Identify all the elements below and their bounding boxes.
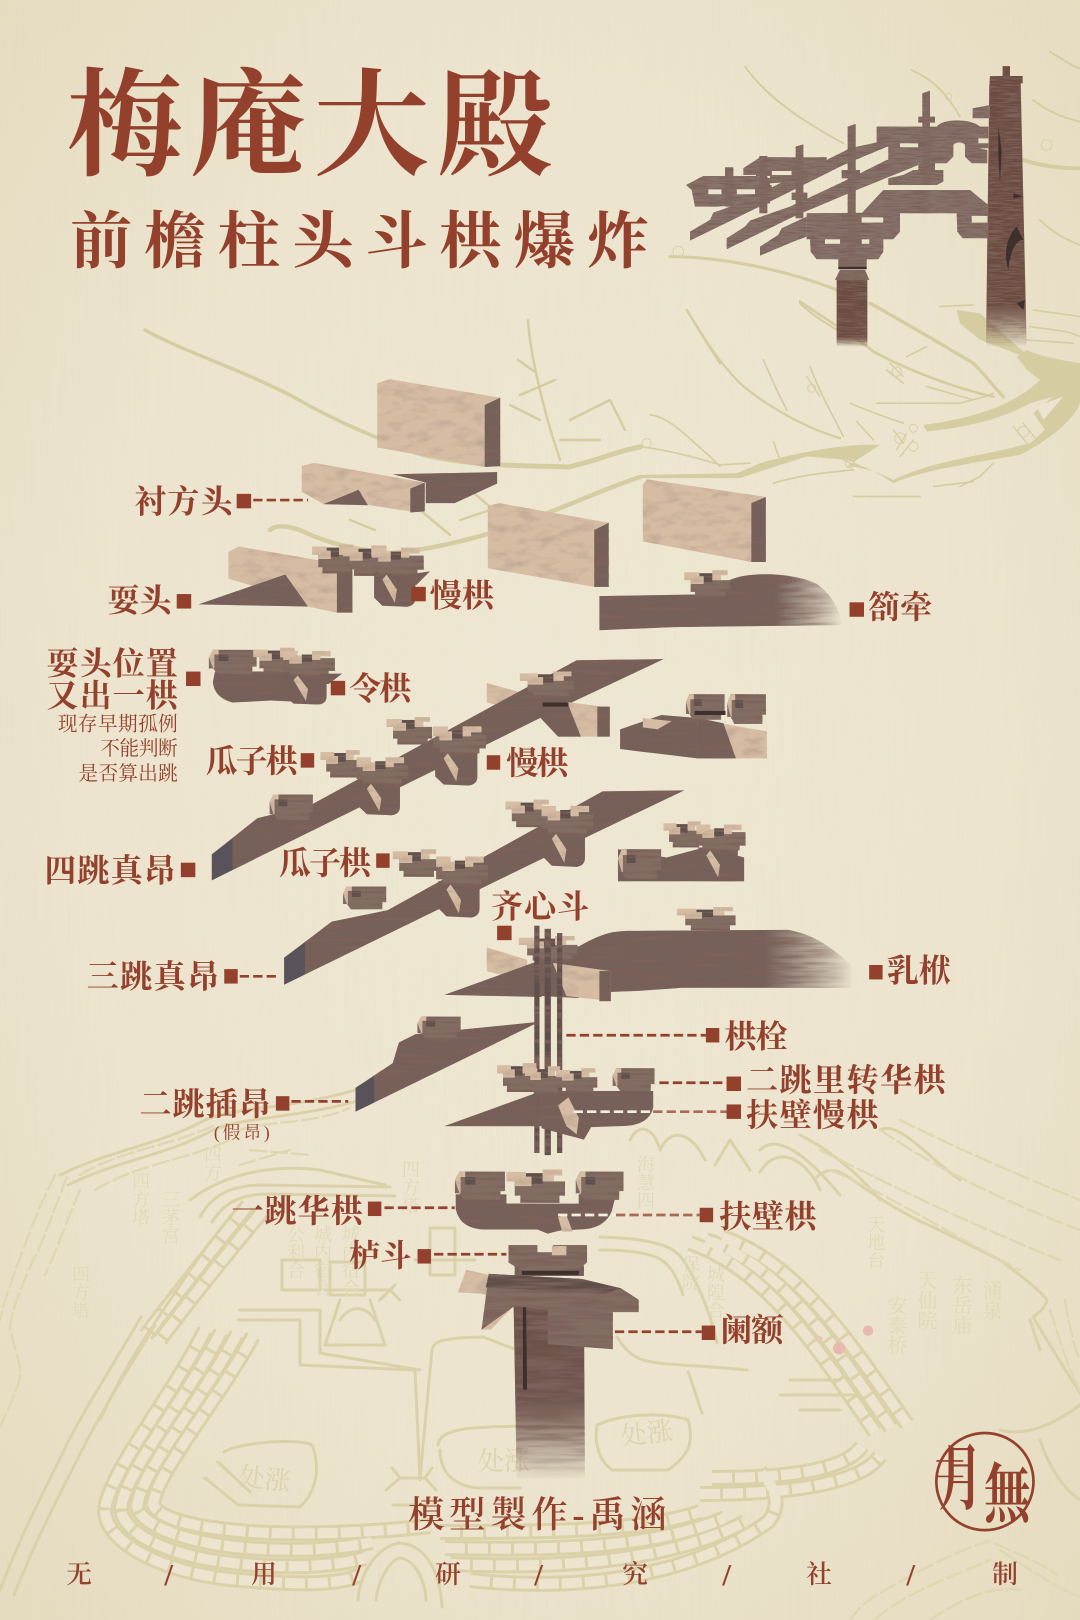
label: 三跳真昂 [87,959,279,995]
logo seal: 月 [938,1439,982,1519]
background: old map linework: 处涨 [237,1462,292,1496]
label: 二跳插昂: 二跳插昂 [140,1086,271,1122]
label: 慢栱 lower: 慢栱 [506,745,571,781]
block: top bearing timber [377,379,500,467]
assembled bracket model, top right [686,66,1027,347]
background: old map linework: 三茅宫 [160,1190,180,1244]
label: 耍头: 耍头 [107,583,175,619]
label: 阑额: 阑额 [720,1312,785,1348]
label: 乳栿: 乳栿 [887,953,953,989]
label: 耍头位置又出一栱: 耍头位置 [47,646,178,682]
fourth-tier true ang [212,659,664,880]
note: 现存早期孤例: 不能判断 [100,738,178,760]
ludou [508,1245,587,1276]
footer credits: / [721,1557,731,1592]
note: 现存早期孤例 [58,713,178,785]
background: plum blossom branches, upper [670,52,1080,364]
label: 箚牵: 箚牵 [868,589,932,625]
label: 扶壁栱: 扶壁栱 [719,1198,819,1234]
footer credits: 研 [435,1560,461,1589]
background: old map linework [0,1085,1080,1620]
block: chenfangtou [302,463,497,512]
footer credits: / [351,1557,361,1592]
footer credits: 社 [806,1560,832,1589]
footer credits: 用 [251,1560,277,1589]
bolts [534,926,562,1155]
third-tier true ang [284,790,684,985]
background: old map linework: 四方塔 [130,1172,150,1226]
footer credits: / [905,1557,915,1592]
background: old map linework: 处涨 [478,1447,530,1476]
label: 栌斗 [349,1239,506,1274]
background: old map linework: 涌泉 [979,1280,1002,1320]
logo seal [936,1433,1033,1532]
label: 慢栱 upper: 慢栱 [430,577,497,613]
zhagian beam [599,570,842,630]
exploded bracket model [198,379,853,1479]
bracket arms [686,105,990,259]
background: old map linework: 处涨 [620,1417,674,1451]
background: old map linework: 东岳庙 [949,1275,972,1335]
label: 栌斗: 栌斗 [349,1239,411,1274]
second-tier inserted ang [356,1017,539,1112]
label: 瓜子栱 upper: 瓜子栱 [206,743,301,779]
background: old map linework: 四方塔 [400,1160,420,1214]
logo seal: 無 [984,1460,1033,1532]
background: plum blossom branches, left [145,320,640,553]
label: 耍头位置又出一栱 [47,646,200,714]
block: right timber [643,479,766,562]
background: old map linework: 公利合 [285,1225,305,1279]
background: old map linework: 海慧四 [635,1155,655,1209]
background: old map linework: 天地台 [865,1215,885,1269]
label: 令栱: 令栱 [349,670,414,706]
label: 扶壁慢栱 [574,1097,881,1133]
note: 假昂: (假昂) [214,1123,270,1143]
footer credits: / [163,1557,173,1592]
pink petals [816,1326,873,1354]
title: 梅庵大殿 [67,63,553,191]
background: old map linework: 天仙院 [914,1270,937,1330]
footer credits [66,1557,1018,1592]
background: old map linework: 城内宿合 [312,1225,332,1297]
footer credits: 无 [66,1560,92,1589]
label: 二跳里转华栱: 二跳里转华栱 [746,1062,949,1098]
label: 衬方头 [134,483,308,519]
label: 二跳插昂 [140,1086,348,1122]
label: 一跳华栱: 一跳华栱 [232,1193,366,1229]
pins and ties [722,91,935,258]
label: 齐心斗: 齐心斗 [491,888,589,924]
block: middle timber [488,503,609,587]
subtitle: 前檐柱头斗栱爆炸 [70,208,649,276]
background: old map linework: 城隍合 [705,1265,725,1319]
background: plum blossom branches, main [640,302,1080,497]
label: 齐心斗 [491,888,589,940]
small column [835,253,869,347]
background: old map linework: 城内宿合 [340,1225,360,1297]
label: 四跳真昂: 四跳真昂 [44,852,176,888]
label: 栱栓: 栱栓 [724,1019,788,1055]
footer credits: 制 [992,1560,1018,1589]
label: 栱栓 [566,1019,788,1055]
linggong [209,648,342,705]
label: 瓜子栱 lower: 瓜子栱 [279,845,374,881]
second-tier huagong [444,1063,655,1140]
right small bracket, tier four [620,694,767,758]
right small bracket, tier three [618,821,746,881]
lane architrave and column [458,1270,639,1479]
note: 现存早期孤例: 现存早期孤例 [58,713,178,735]
background: old map linework: 保院 [680,1255,700,1291]
first-tier huagong [455,1170,624,1234]
label: 三跳真昂: 三跳真昂 [87,959,219,995]
label: 一跳华栱 [232,1193,455,1229]
background: old map linework: 四方塔 [70,1265,90,1319]
footer credits: 究 [622,1560,648,1589]
note: 现存早期孤例: 是否算出跳 [79,763,178,785]
right column [986,66,1027,347]
label: 耍头位置又出一栱: 又出一栱 [47,678,181,714]
background: old map linework: 安泰桥 [884,1295,907,1355]
footer credits: / [533,1557,543,1592]
label: 扶壁慢栱: 扶壁慢栱 [746,1097,881,1133]
label: 扶壁栱 [558,1198,819,1234]
label: 阑额 [615,1312,785,1348]
shuatou piece with mangong [198,544,430,613]
credit: model maker: 模型製作-禹涵 [408,1495,667,1535]
ruzhu beam and qixindou [444,907,853,1001]
background: old map linework: 四方 [202,1145,222,1181]
label: 二跳里转华栱 [659,1062,949,1098]
label: 衬方头: 衬方头 [134,483,236,519]
